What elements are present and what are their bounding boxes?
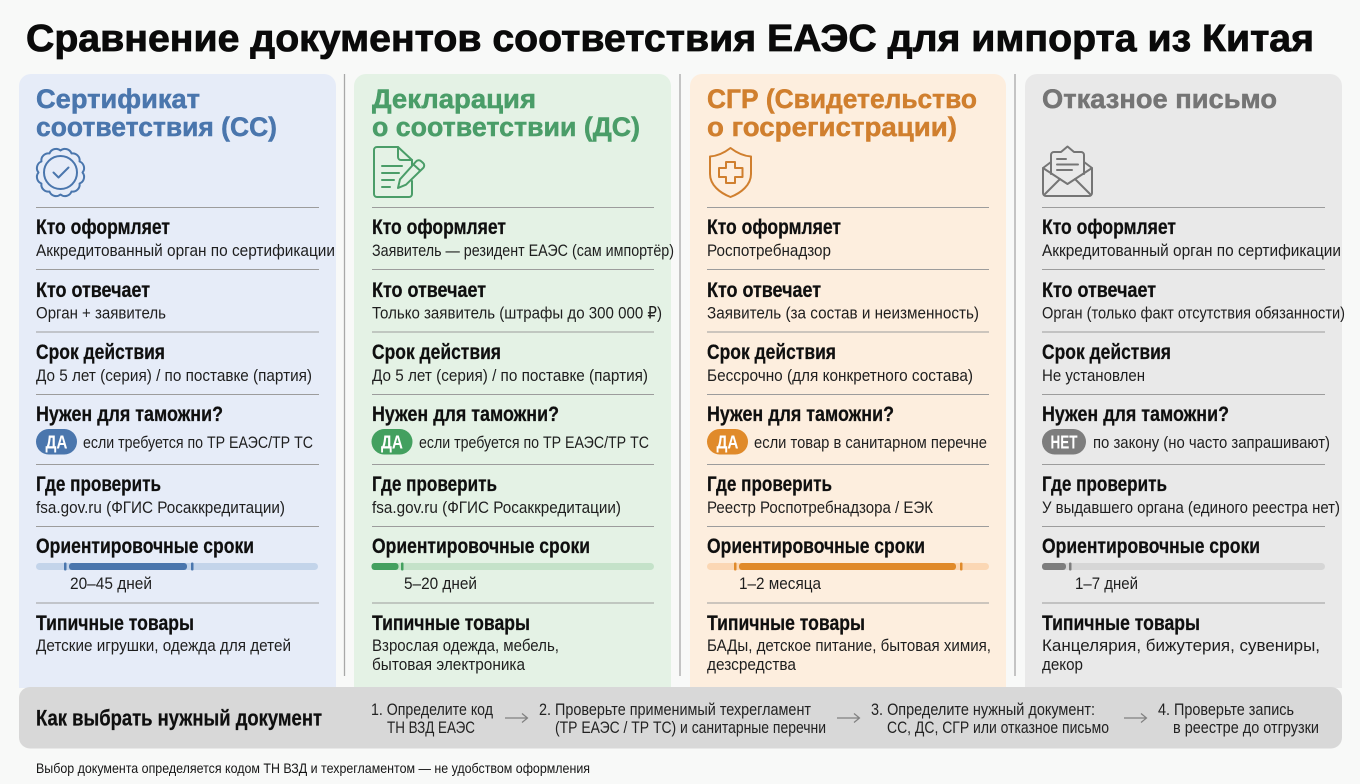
row: нужен для таможни: Нужен для таможни? [1042,403,1229,426]
row: ориентировочные сроки: Ориентировочные сроки [372,535,590,558]
step 3: 3. Определите нужный документ: [871,700,1095,719]
row: кто отвечает [36,279,166,322]
row: типичные товары: декор [1042,655,1083,674]
row: типичные товары: Канцелярия, бижутерия, сувениры, [1042,636,1320,655]
row: нужен для таможни: Нужен для таможни? [372,403,559,426]
row: кто отвечает [707,279,979,322]
step 2: (ТР ЕАЭС / ТР ТС) и санитарные перечни [555,718,826,737]
row: где проверить [36,473,285,517]
row: нужен для таможни: Нужен для таможни? [707,403,894,426]
row: срок действия: Срок действия [1042,341,1171,364]
icon: envelope with letter [1043,146,1092,196]
row: срок действия: До 5 лет (серия) / по поставке (партия) [36,366,312,385]
row: кто оформляет: Заявитель — резидент ЕАЭС (сам импортёр) [372,241,674,260]
row: типичные товары: БАДы, детское питание, бытовая химия, [707,636,991,655]
panel heading: о госрегистрации) [707,112,957,142]
row: типичные товары [1042,612,1320,674]
row: кто оформляет [1042,216,1341,260]
row: кто оформляет [372,216,674,260]
panel heading: Сертификат [36,84,200,114]
row: нужен для таможни [372,403,649,454]
row: где проверить: fsa.gov.ru (ФГИС Росаккредитации) [36,498,285,517]
row: где проверить: Где проверить [707,473,832,496]
bar heading: Как выбрать нужный документ [36,706,322,730]
row: срок действия [1042,341,1171,385]
badge: да: ДА [716,432,738,452]
icon: shield with cross [710,148,751,197]
badge: да [372,429,412,454]
arrow [837,714,860,722]
row: нужен для таможни: по закону (но часто запрашивают) [1093,433,1330,452]
step 4 [1158,700,1319,737]
timeline bar [36,562,318,570]
row: нужен для таможни: если требуется по ТР ЕАЭС/ТР ТС [419,433,649,452]
row: срок действия: Срок действия [707,341,836,364]
row: ориентировочные сроки: Ориентировочные сроки [36,535,254,558]
row: срок действия: Срок действия [36,341,165,364]
row: ориентировочные сроки: Ориентировочные сроки [707,535,925,558]
row: нужен для таможни: Нужен для таможни? [36,403,223,426]
row: кто отвечает: Кто отвечает [1042,279,1156,302]
row: кто оформляет [36,216,335,260]
row: кто отвечает: Орган + заявитель [36,304,166,322]
row: типичные товары: Типичные товары [372,612,530,635]
badge: да: ДА [381,432,403,452]
panel background [354,74,671,688]
row: где проверить: Где проверить [36,473,161,496]
step 3: СС, ДС, СГР или отказное письмо [887,718,1109,737]
row: ориентировочные сроки: 20–45 дней [70,574,152,593]
row: где проверить: Реестр Роспотребнадзора / ЕЭК [707,498,933,517]
row: типичные товары [372,612,559,674]
panel heading [36,84,277,142]
row: кто оформляет [707,216,841,260]
badge: нет [1042,429,1086,454]
panel heading: соответствия (СС) [36,112,277,142]
row: типичные товары: Типичные товары [1042,612,1200,635]
row: кто отвечает: Только заявитель (штрафы до 300 000 ₽) [372,304,662,322]
row: нужен для таможни [36,403,313,454]
row: кто оформляет: Роспотребнадзор [707,241,831,260]
row: кто отвечает: Заявитель (за состав и неизменность) [707,304,979,322]
panel: сертификат соответствия [19,74,336,688]
row: где проверить: fsa.gov.ru (ФГИС Росаккредитации) [372,498,621,517]
row: типичные товары [707,612,991,674]
row: срок действия: До 5 лет (серия) / по поставке (партия) [372,366,648,385]
panel heading: СГР (Свидетельство [707,84,977,114]
row: ориентировочные сроки: 1–2 месяца [739,574,821,593]
row: ориентировочные сроки [372,535,654,593]
footnote: Выбор документа определяется кодом ТН ВЗД и техрегламентом — не удобством оформления [36,760,590,776]
row: ориентировочные сроки: 5–20 дней [404,574,477,593]
timeline bar [372,562,654,570]
row: нужен для таможни [1042,403,1330,454]
row: кто оформляет: Кто оформляет [1042,216,1176,239]
badge: да [36,429,77,454]
row: ориентировочные сроки [36,535,318,593]
row: срок действия: Бессрочно (для конкретного состава) [707,366,973,385]
row: ориентировочные сроки: 1–7 дней [1075,574,1138,593]
panel background [19,74,336,688]
row: кто отвечает: Кто отвечает [36,279,150,302]
row: срок действия [372,341,648,385]
row: ориентировочные сроки [1042,535,1325,593]
row: нужен для таможни: если требуется по ТР ЕАЭС/ТР ТС [83,433,313,452]
row: кто оформляет: Кто оформляет [707,216,841,239]
row: срок действия [36,341,312,385]
badge: нет: НЕТ [1050,432,1078,452]
badge: да [707,429,748,454]
row: типичные товары: Типичные товары [707,612,865,635]
step 1 [371,700,493,737]
step 2: 2. Проверьте применимый техрегламент [539,700,811,719]
row: срок действия: Срок действия [372,341,501,364]
row: кто отвечает: Кто отвечает [707,279,821,302]
step 2 [539,700,826,737]
panel background [690,74,1006,688]
step 4: 4. Проверьте запись [1158,700,1294,719]
row: срок действия: Не установлен [1042,366,1145,385]
bar background [19,687,1342,748]
panel heading: о соответствии (ДС) [372,112,640,142]
row: где проверить [372,473,621,517]
row: где проверить [707,473,933,517]
panel heading: Декларация [372,84,536,114]
row: типичные товары: бытовая электроника [372,655,525,674]
row: ориентировочные сроки: Ориентировочные сроки [1042,535,1260,558]
row: кто отвечает [1042,279,1345,322]
timeline bar [1042,562,1325,570]
row: типичные товары: Взрослая одежда, мебель, [372,636,559,655]
row: кто оформляет: Кто оформляет [36,216,170,239]
step 1: 1. Определите код [371,700,493,719]
row: кто отвечает [372,279,662,322]
row: кто оформляет: Аккредитованный орган по сертификации [36,241,335,260]
arrow [1124,714,1146,722]
row: типичные товары: дезсредства [707,655,796,674]
panel: СГР [690,74,1006,688]
icon: document with pencil [374,147,424,197]
row: где проверить [1042,473,1340,517]
panel heading: Отказное письмо [1042,84,1277,114]
row: типичные товары [36,612,291,655]
row: нужен для таможни [707,403,987,454]
icon: certificate seal [37,149,84,196]
step 3 [871,700,1109,737]
panel: декларация о соответствии [354,74,674,688]
timeline bar [707,562,989,570]
row: типичные товары: Детские игрушки, одежда для детей [36,636,291,655]
row: нужен для таможни: если товар в санитарном перечне [754,433,987,452]
row: кто отвечает: Кто отвечает [372,279,486,302]
arrow [505,714,528,722]
row: где проверить: Где проверить [372,473,497,496]
row: кто оформляет: Кто оформляет [372,216,506,239]
panel: отказное письмо [1025,74,1345,688]
panel heading [372,84,640,142]
row: типичные товары: Типичные товары [36,612,194,635]
panel: как выбрать документ [19,687,1342,748]
panel background [1025,74,1342,688]
row: ориентировочные сроки [707,535,989,593]
badge: да: ДА [46,432,68,452]
row: где проверить: Где проверить [1042,473,1167,496]
panel heading [707,84,977,142]
step 1: ТН ВЗД ЕАЭС [387,718,475,737]
title: Сравнение документов соответствия ЕАЭС для импорта из Китая [26,18,1314,60]
row: срок действия [707,341,973,385]
step 4: в реестре до отгрузки [1173,718,1319,737]
